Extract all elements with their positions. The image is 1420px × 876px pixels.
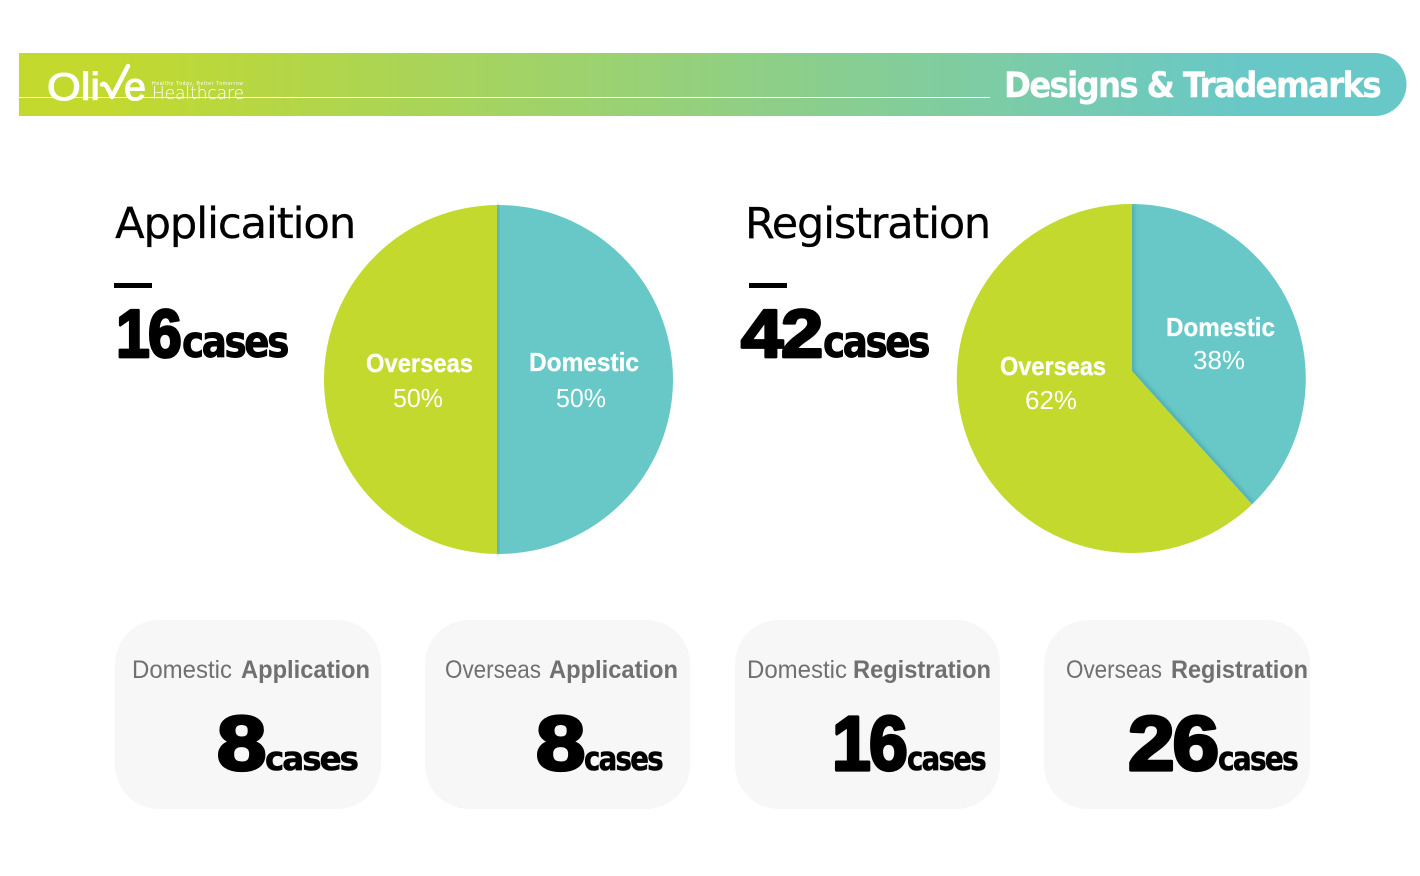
heading: application: cases [182, 317, 288, 368]
label: domestic 50% [529, 347, 639, 413]
card: overseas application: Application [549, 656, 678, 684]
label: overseas 50%: Overseas [366, 348, 473, 378]
label: overseas 62% [1000, 351, 1106, 415]
label: overseas 62%: Overseas [1000, 351, 1106, 381]
card: overseas registration: cases [1218, 739, 1298, 778]
card: overseas registration: Registration [1171, 656, 1308, 684]
heading: registration: cases [823, 317, 929, 368]
card: overseas application: cases [584, 739, 663, 778]
heading: registration [741, 199, 990, 372]
label: overseas 50% [366, 348, 473, 413]
card: domestic application: Domestic [132, 656, 232, 684]
label: overseas 50%: 50% [393, 383, 443, 413]
card: domestic registration: Registration [853, 656, 991, 684]
card: domestic application [115, 620, 381, 809]
card: domestic registration [735, 620, 1000, 809]
label: domestic 38%: Domestic [1166, 312, 1275, 342]
label: domestic 50%: Domestic [529, 347, 639, 377]
pie chart: application [324, 205, 673, 554]
heading: application: 16 [116, 296, 180, 372]
pie chart: registration [957, 204, 1306, 553]
header title: Designs & Trademarks [1004, 66, 1381, 106]
label: domestic 50%: 50% [556, 383, 606, 413]
heading: registration: 42 [741, 296, 821, 372]
card: overseas registration [1044, 620, 1310, 809]
card: domestic application: cases [265, 739, 358, 778]
card: domestic registration: Domestic [747, 656, 847, 684]
card: overseas application: Overseas [445, 656, 541, 684]
label: overseas 62%: 62% [1025, 385, 1077, 415]
card: domestic application: 8 [217, 701, 264, 787]
logo: Olive Healthcare: e [124, 66, 146, 109]
logo: Olive Healthcare: Healthcare [152, 83, 244, 104]
card: overseas registration: 26 [1128, 701, 1217, 787]
card: domestic registration: 16 [832, 701, 906, 787]
card: domestic registration: cases [907, 739, 986, 778]
label: domestic 38% [1166, 312, 1275, 375]
card: domestic application: Application [241, 656, 370, 684]
heading: application: Applicaition [115, 199, 355, 249]
heading: registration: Registration [745, 199, 990, 249]
card: overseas application: 8 [536, 701, 583, 787]
label: domestic 38%: 38% [1193, 345, 1245, 375]
header banner [19, 53, 1406, 116]
heading: application [114, 199, 355, 372]
card: overseas application [425, 620, 690, 809]
logo: Olive Healthcare: Healthy Today, Better Tomorrow [152, 81, 243, 87]
logo: Olive Healthcare: Oli [47, 66, 100, 109]
logo: Olive Healthcare [47, 66, 244, 109]
card: overseas registration: Overseas [1066, 656, 1162, 684]
